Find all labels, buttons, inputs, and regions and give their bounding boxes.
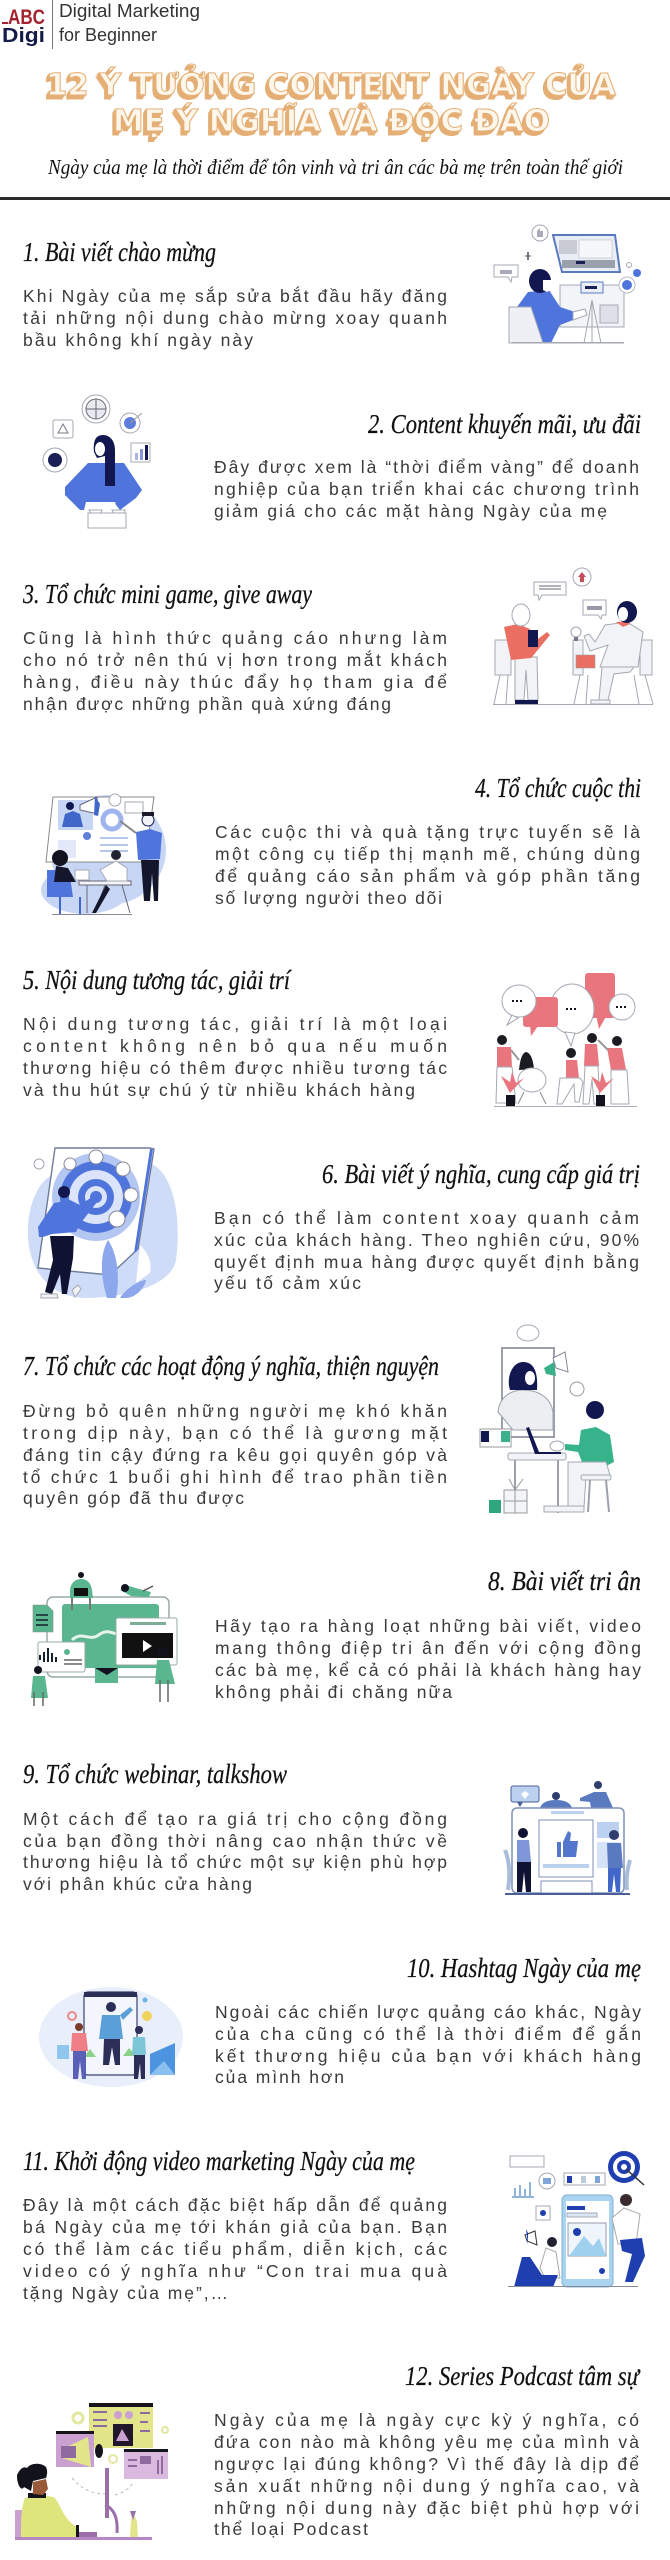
- illustration 9: social like page: [505, 1781, 630, 1895]
- text block 5: Nội dung tương tác, giải trí là một loại: [23, 1014, 447, 1034]
- illustration 10: phone with people: [39, 1987, 183, 2087]
- text block 8: các bà mẹ, kể cả có phải là khách hàng hay: [215, 1660, 641, 1680]
- text block 4: để quảng cáo sản phẩm và góp phần tăng: [215, 866, 640, 886]
- text block 2: giảm giá cho các mặt hàng Ngày của mẹ: [214, 501, 607, 521]
- heading 5: 5. Nội dung tương tác, giải trí: [23, 965, 292, 995]
- illustration 3: two women talking: [493, 568, 653, 705]
- text block 10: của mình hơn: [215, 2067, 344, 2087]
- text block 11: có thể làm các tiểu phẩm, diễn kịch, các: [23, 2238, 447, 2259]
- panel: item 11: [23, 2146, 645, 2303]
- text block 10: của cha cũng có thể là thời điểm để gắn: [215, 2023, 641, 2044]
- text block 3: nhận được những phần quà xứng đáng: [23, 694, 391, 714]
- text block 7: tổ chức 1 buổi ghi hình để trao phần tiền: [23, 1467, 447, 1487]
- text block 11: [23, 2194, 447, 2303]
- text block 8: mang thông điệp tri ân đến với cộng đồng: [215, 1638, 641, 1658]
- heading 8: 8. Bài viết tri ân: [488, 1566, 641, 1596]
- heading 1: 1. Bài viết chào mừng: [23, 237, 216, 267]
- text block 6: quyết định mua hàng được quyết định bằng: [214, 1251, 639, 1272]
- text block 12: sản xuất những nội dung ý nghĩa cao, và: [214, 2476, 639, 2496]
- text block 4: số lượng người theo dõi: [215, 888, 442, 908]
- text block 9: của bạn đồng thời nâng cao nhận thức về: [23, 1831, 447, 1851]
- text block 2: [214, 457, 639, 521]
- text block 12: thể loại Podcast: [214, 2519, 368, 2539]
- text block 12: ngược lại đúng không? Vì thế đây là dịp để: [214, 2454, 639, 2474]
- illustration 5: people chatting with bubbles: [494, 973, 637, 1107]
- text block 10: kết thương hiệu của bạn với khách hàng: [215, 2046, 641, 2066]
- text block 4: Các cuộc thi và quà tặng trực tuyến sẽ là: [215, 822, 640, 842]
- panel: item 7: [23, 1325, 614, 1513]
- panel: item 8: [31, 1566, 641, 1706]
- heading 7: 7. Tổ chức các hoạt động ý nghĩa, thiện nguyện: [23, 1351, 439, 1381]
- heading 9: 9. Tổ chức webinar, talkshow: [23, 1759, 287, 1789]
- text block 2: Đây được xem là “thời điểm vàng” để doanh: [214, 457, 639, 477]
- logo: ABC: [8, 6, 45, 29]
- text block 11: bá Ngày của mẹ tới khán giả của bạn. Bạn: [23, 2217, 447, 2237]
- text block 1: bầu không khí ngày này: [23, 330, 253, 350]
- logo: for Beginner: [59, 25, 157, 45]
- text block 8: không phải đi chăng nữa: [215, 1682, 452, 1702]
- illustration 2: woman with floating icons: [43, 395, 150, 528]
- panel: item 2: [43, 395, 641, 528]
- text block 1: [23, 285, 447, 350]
- illustration 12: woman at computer with podcast windows: [15, 2403, 168, 2540]
- text block 9: với phân khúc cửa hàng: [23, 1874, 252, 1894]
- title: 12 Ý TƯỞNG CONTENT NGÀY CỦA: [46, 63, 617, 103]
- text block 3: hàng, điều này thúc đẩy họ tham gia để: [23, 672, 447, 692]
- text block 1: tải những nội dung chào mừng xoay quanh: [23, 308, 447, 328]
- text block 12: đứa con nào mà không yêu mẹ của mình và: [214, 2432, 639, 2452]
- text block 7: đáng tin cậy đứng ra kêu gọi quyên góp và: [23, 1445, 447, 1465]
- text block 5: và thu hút sự chú ý từ nhiều khách hàng: [23, 1080, 415, 1100]
- text block 3: [23, 628, 447, 714]
- text block 6: yếu tố cảm xúc: [214, 1273, 361, 1293]
- title: MẸ Ý NGHĨA VÀ ĐỘC ĐÁO: [113, 102, 550, 139]
- text block 1: Khi Ngày của mẹ sắp sửa bắt đầu hãy đăng: [23, 285, 447, 306]
- text block 10: [215, 2002, 641, 2087]
- panel: item 6: [28, 1148, 640, 1298]
- text block 4: một công cụ tiếp thị mạnh mẽ, chúng dùng: [215, 844, 640, 864]
- text block 11: Đây là một cách đặc biệt hấp dẫn để quảng: [23, 2194, 447, 2215]
- text block 11: video có ý nghĩa như “Con trai mua quà: [23, 2261, 447, 2281]
- text block 12: Ngày của mẹ là ngày cực kỳ ý nghĩa, có: [214, 2410, 639, 2430]
- panel: item 12: [15, 2361, 641, 2540]
- text block 5: [23, 1014, 447, 1100]
- illustration 6: man touching target: [28, 1148, 178, 1298]
- text block 7: [23, 1401, 447, 1508]
- text block 9: [23, 1809, 447, 1894]
- panel: item 1: [23, 225, 641, 350]
- panel: item 5: [23, 965, 637, 1107]
- heading 11: 11. Khởi động video marketing Ngày của mẹ: [23, 2146, 415, 2176]
- text block 10: Ngoài các chiến lược quảng cáo khác, Ngày: [215, 2002, 641, 2022]
- text block 8: Hãy tạo ra hàng loạt những bài viết, video: [215, 1616, 641, 1636]
- illustration 7: charity video call: [480, 1325, 614, 1513]
- text block 9: thương hiệu là tổ chức một sự kiện phù hợp: [23, 1852, 447, 1872]
- text block 6: xúc của khách hàng. Theo nghiên cứu, 90%: [214, 1230, 639, 1250]
- logo: [2, 0, 200, 49]
- illustration 11: phone, megaphone and target: [508, 2151, 645, 2287]
- text block 9: Một cách để tạo ra giá trị cho cộng đồng: [23, 1809, 447, 1829]
- text block 12: những nội dung này đặc biệt phù hợp với: [214, 2498, 639, 2518]
- illustration 8: team around video screen: [31, 1572, 177, 1706]
- panel: item 10: [39, 1953, 641, 2087]
- text block 4: [215, 822, 640, 908]
- text block 7: trong dịp này, bạn có thể là gương mặt: [23, 1423, 447, 1443]
- logo: Digi: [2, 25, 45, 47]
- text block 6: Bạn có thể làm content xoay quanh cảm: [214, 1208, 639, 1228]
- text block 7: Đừng bỏ quên những người mẹ khó khăn: [23, 1401, 447, 1421]
- illustration 4: team with presentation board: [41, 794, 166, 915]
- title: [46, 63, 617, 139]
- text block 12: [214, 2410, 639, 2539]
- text block 2: nghiệp của bạn triển khai các chương trình: [214, 479, 639, 499]
- illustration 1: streamer at desk: [494, 225, 641, 344]
- text block 5: thương hiệu có thêm được nhiều tương tác: [23, 1058, 447, 1078]
- panel: item 3: [22, 568, 653, 714]
- heading 3: 3. Tổ chức mini game, give away: [22, 579, 312, 609]
- text block 6: [214, 1208, 639, 1293]
- panel: item 9: [23, 1759, 630, 1895]
- text block 3: cho nó trở nên thú vị hơn trong mắt khách: [23, 649, 447, 670]
- text block 11: tặng Ngày của mẹ”,…: [23, 2283, 228, 2303]
- panel: item 4: [41, 773, 641, 915]
- text block 5: content không nên bỏ qua nếu muốn: [23, 1036, 447, 1056]
- text block 8: [215, 1616, 641, 1702]
- subtitle: Ngày của mẹ là thời điểm để tôn vinh và tri ân các bà mẹ trên toàn thế giới: [47, 155, 623, 179]
- text block 7: quyên góp đã thu được: [23, 1488, 244, 1508]
- logo: Digital Marketing: [59, 1, 200, 21]
- text block 3: Cũng là hình thức quảng cáo nhưng làm: [23, 628, 447, 648]
